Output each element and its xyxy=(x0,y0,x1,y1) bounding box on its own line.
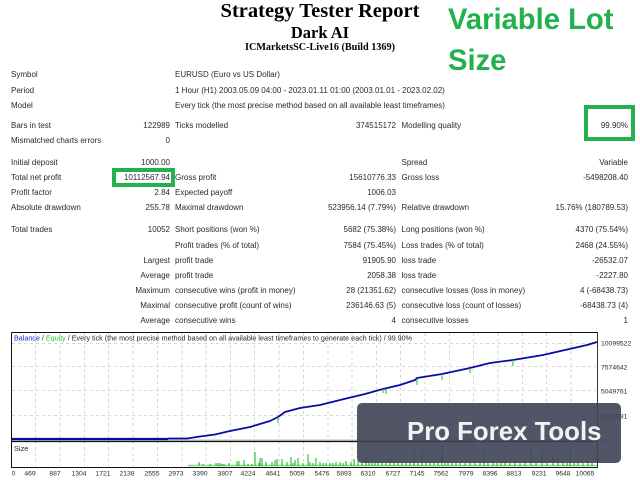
row: total net profit: Gross profit xyxy=(175,173,216,182)
row: average consecutive: Average xyxy=(140,316,170,325)
row: mismatched charts errors: 0 xyxy=(166,136,170,145)
row: absolute drawdown: Relative drawdown xyxy=(402,203,469,212)
row: maximum consecutive: 4 (-68438.73) xyxy=(580,286,628,295)
x axis labels: 6310 xyxy=(360,470,376,478)
row: profit trades: Loss trades (% of total) xyxy=(402,241,484,250)
row: bars in test: Bars in test xyxy=(11,121,51,130)
row: average trade: -2227.80 xyxy=(596,271,628,280)
x axis labels: 7562 xyxy=(433,470,449,478)
heading: variable lot size: Variable Lot xyxy=(448,4,613,36)
row: profit factor: Profit factor xyxy=(11,188,52,197)
row: total net profit: 15610776.33 xyxy=(349,173,396,182)
x axis labels: 2973 xyxy=(168,470,184,478)
x axis labels: 8396 xyxy=(482,470,498,478)
row: total trades: Total trades xyxy=(11,225,52,234)
row: bars in test: Modelling quality xyxy=(402,121,461,130)
row: average trade: Average xyxy=(140,271,170,280)
row: total trades: 4370 (75.54%) xyxy=(576,225,628,234)
row: maximum consecutive: Maximum xyxy=(135,286,170,295)
row: largest trade: Largest xyxy=(143,256,170,265)
broker and build: ICMarketsSC-Live16 (Build 1369) xyxy=(245,42,395,53)
row: average trade: profit trade xyxy=(175,271,213,280)
panel: report table xyxy=(11,70,628,325)
row: total net profit: 10112567.94 xyxy=(124,173,170,182)
y axis labels: 2524881 xyxy=(601,414,628,420)
row: total net profit xyxy=(11,173,628,182)
row: initial deposit: Initial deposit xyxy=(11,158,58,167)
highlight box: modelling quality xyxy=(584,105,635,141)
x axis labels: 4224 xyxy=(240,470,256,478)
y axis labels xyxy=(601,340,631,444)
report title: Strategy Tester Report xyxy=(221,0,419,22)
x axis labels: 9231 xyxy=(531,470,547,478)
row: bars in test xyxy=(11,121,628,130)
row: profit trades xyxy=(175,241,628,250)
y axis labels: 7574642 xyxy=(601,364,628,372)
balance curve xyxy=(12,342,597,440)
row: maximal consecutive xyxy=(140,301,628,310)
y axis labels: 10099522 xyxy=(601,340,631,348)
row: period xyxy=(11,86,445,95)
x axis labels: 7979 xyxy=(458,470,474,478)
x axis labels: 2555 xyxy=(144,470,160,478)
row: average consecutive: 1 xyxy=(624,316,628,325)
row: initial deposit: Variable xyxy=(599,158,628,167)
row: largest trade: -26532.07 xyxy=(592,256,628,265)
row: model xyxy=(11,101,445,110)
row: largest trade xyxy=(143,256,628,265)
row: profit factor: 2.84 xyxy=(154,188,170,197)
row: bars in test: 99.90% xyxy=(601,121,628,130)
row: period: Period xyxy=(11,86,34,95)
row: maximum consecutive: 28 (21351.62) xyxy=(346,286,396,295)
row: largest trade: 91905.90 xyxy=(363,256,396,265)
row: maximal consecutive: -68438.73 (4) xyxy=(580,301,628,310)
row: maximum consecutive: consecutive wins (profit in money) xyxy=(175,286,296,295)
x axis labels: 8813 xyxy=(506,470,522,478)
row: average consecutive xyxy=(140,316,628,325)
row: average trade: loss trade xyxy=(402,271,436,280)
row: maximal consecutive: Maximal xyxy=(140,301,170,310)
row: average trade xyxy=(140,271,628,280)
row: model: Every tick (the most precise method based on all available least timeframes) xyxy=(175,101,445,110)
heading: variable lot size xyxy=(448,4,614,77)
row: average consecutive: consecutive wins xyxy=(175,316,235,325)
row: average consecutive: consecutive losses xyxy=(402,316,469,325)
x axis labels: 10065 xyxy=(576,470,595,478)
x axis labels xyxy=(12,470,595,478)
x axis labels: 1721 xyxy=(95,470,111,478)
x axis labels: 887 xyxy=(49,470,61,478)
x axis labels: 1304 xyxy=(71,470,87,478)
row: profit factor: 1006.03 xyxy=(367,188,396,197)
row: largest trade: profit trade xyxy=(175,256,213,265)
x axis labels: 5476 xyxy=(314,470,330,478)
x axis labels: 3390 xyxy=(192,470,208,478)
watermark badge: Pro Forex Tools xyxy=(357,403,621,463)
row: total trades: Short positions (won %) xyxy=(175,225,259,234)
y axis labels: 5049761 xyxy=(601,388,628,396)
x axis labels: 469 xyxy=(24,470,36,478)
row: total net profit: Gross loss xyxy=(402,173,439,182)
row: maximum consecutive xyxy=(135,286,628,295)
row: maximal consecutive: consecutive loss (count of losses) xyxy=(402,301,521,310)
row: total trades: Long positions (won %) xyxy=(402,225,485,234)
row: largest trade: loss trade xyxy=(402,256,436,265)
row: absolute drawdown: Absolute drawdown xyxy=(11,203,81,212)
chart frame xyxy=(12,332,598,468)
row: symbol: EURUSD (Euro vs US Dollar) xyxy=(175,70,280,79)
row: absolute drawdown: 255.78 xyxy=(146,203,170,212)
row: absolute drawdown: Maximal drawdown xyxy=(175,203,243,212)
expert advisor name: Dark AI xyxy=(291,23,349,42)
row: maximal consecutive: 236146.63 (5) xyxy=(346,301,396,310)
row: total trades: 5682 (75.38%) xyxy=(344,225,396,234)
row: maximum consecutive: consecutive losses (loss in money) xyxy=(402,286,525,295)
row: average consecutive: 4 xyxy=(392,316,396,325)
row: model: Model xyxy=(11,101,33,110)
row: profit factor: Expected payoff xyxy=(175,188,232,197)
row: profit factor xyxy=(11,188,396,197)
row: initial deposit: 1000.00 xyxy=(141,158,170,167)
row: bars in test: 122989 xyxy=(143,121,170,130)
chart legend text: Balance / Equity / Every tick (the most precise method based on all available least timeframes to generate each tick) / 99.90% xyxy=(14,334,412,342)
y axis labels: 0 xyxy=(601,438,605,444)
row: symbol xyxy=(11,70,280,79)
row: profit trades: 2468 (24.55%) xyxy=(576,241,628,250)
row: total net profit: Total net profit xyxy=(11,173,61,182)
row: symbol: Symbol xyxy=(11,70,38,79)
x axis labels: 9648 xyxy=(555,470,571,478)
x axis labels: 3807 xyxy=(217,470,233,478)
row: absolute drawdown: 15.76% (180789.53) xyxy=(556,203,628,212)
x axis labels: 6727 xyxy=(385,470,401,478)
x axis labels: 2138 xyxy=(119,470,135,478)
row: profit trades: 7584 (75.45%) xyxy=(344,241,396,250)
x axis labels: 0 xyxy=(12,470,16,478)
row: initial deposit: Spread xyxy=(402,158,427,167)
row: period: 1 Hour (H1) 2003.05.09 04:00 - 2023.01.11 01:00 (2003.01.01 - 2023.02.02) xyxy=(175,86,445,95)
x axis labels: 5893 xyxy=(336,470,352,478)
row: mismatched charts errors xyxy=(11,136,170,145)
row: average trade: 2058.38 xyxy=(367,271,396,280)
x axis labels: 4641 xyxy=(265,470,281,478)
row: total trades: 10052 xyxy=(148,225,170,234)
row: bars in test: 374515172 xyxy=(356,121,396,130)
row: total trades xyxy=(11,225,628,234)
watermark text: Pro Forex Tools xyxy=(407,418,601,446)
size panel label: Size xyxy=(14,444,28,453)
row: total net profit: -5498208.40 xyxy=(583,173,628,182)
x axis labels: 7145 xyxy=(409,470,425,478)
row: mismatched charts errors: Mismatched charts errors xyxy=(11,136,101,145)
row: profit trades: Profit trades (% of total) xyxy=(175,241,259,250)
row: bars in test: Ticks modelled xyxy=(175,121,228,130)
row: absolute drawdown xyxy=(11,203,628,212)
size bars xyxy=(188,446,597,466)
row: maximal consecutive: consecutive profit (count of wins) xyxy=(175,301,292,310)
row: absolute drawdown: 523956.14 (7.79%) xyxy=(328,203,396,212)
heading: variable lot size: Size xyxy=(448,45,506,77)
highlight box: total net profit xyxy=(112,168,175,187)
x axis labels: 5059 xyxy=(289,470,305,478)
row: initial deposit xyxy=(11,158,628,167)
